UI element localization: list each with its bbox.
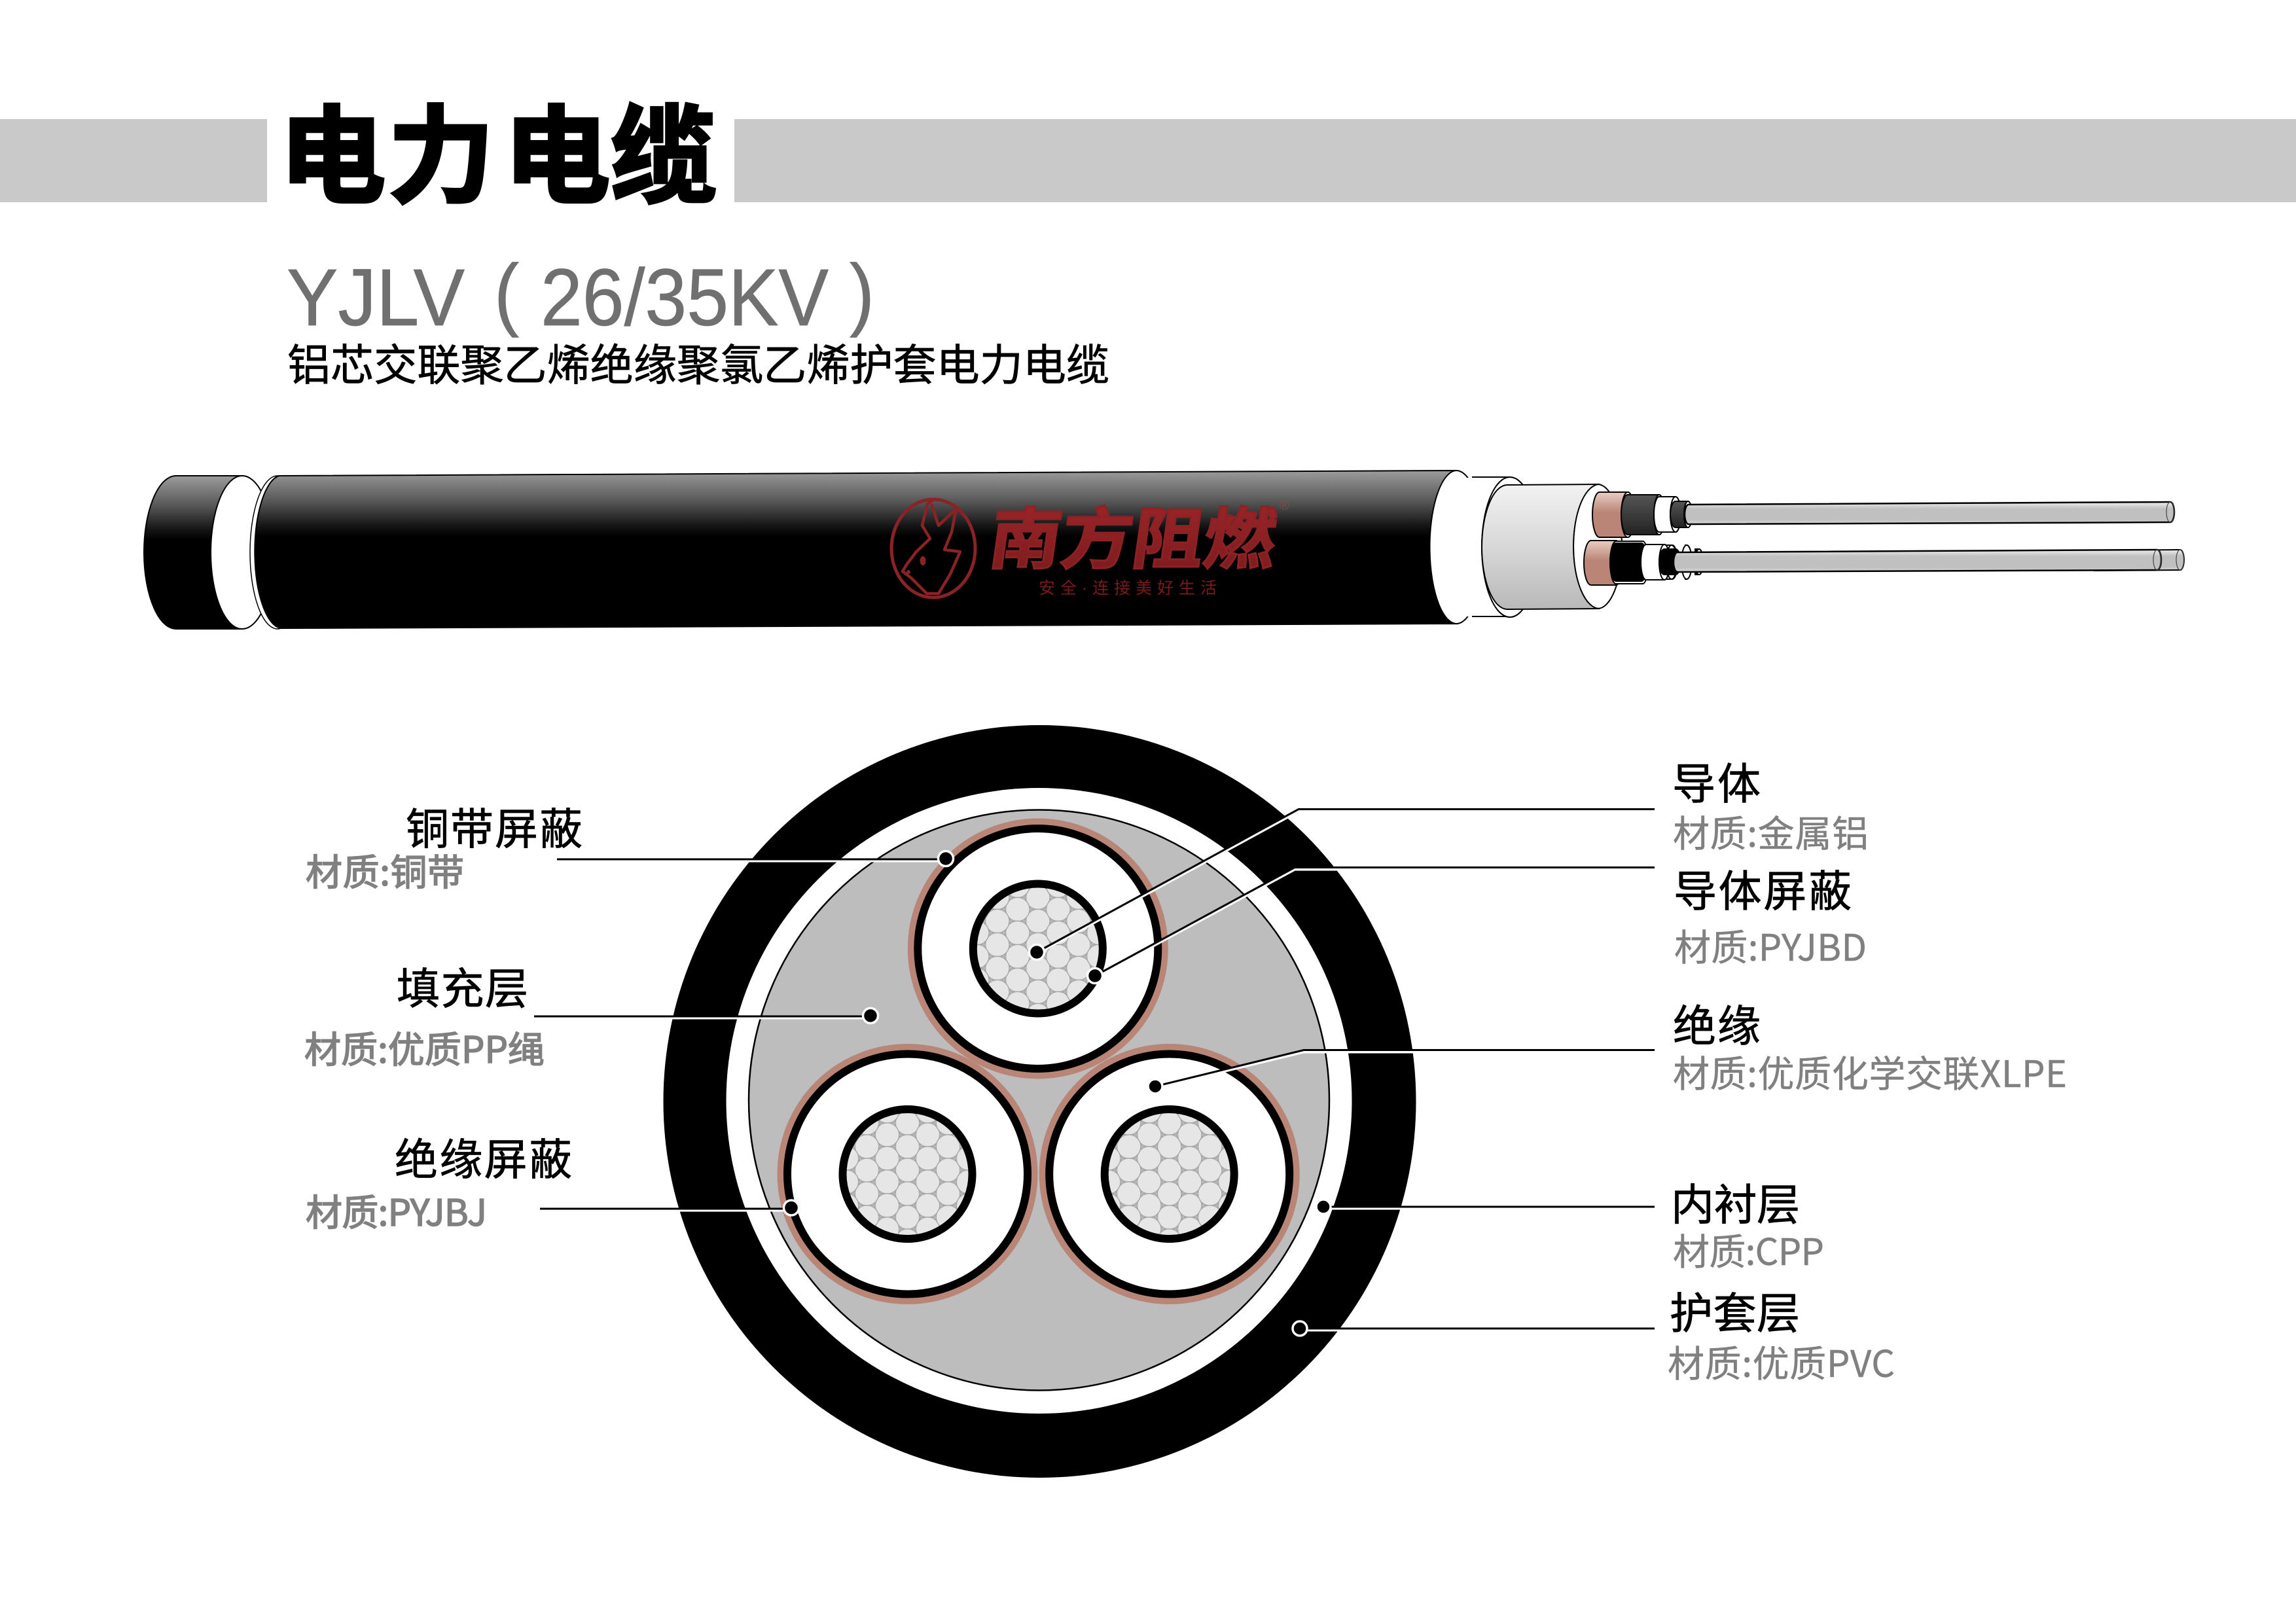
logo: slogan: 安全·连接美好生活 xyxy=(1039,579,1217,597)
upper conductor tube xyxy=(1685,502,2174,524)
cable side view xyxy=(144,471,2184,629)
logo: brand name: 南方阻燃 xyxy=(984,486,1283,582)
label: filler layer xyxy=(304,965,545,1074)
label: insulation: 绝缘 xyxy=(1673,1002,1761,1050)
label: copper tape shield xyxy=(306,805,583,897)
lower core layers xyxy=(1584,541,1703,585)
label: outer sheath: 护套层 xyxy=(1670,1289,1800,1338)
label: conductor: 导体 xyxy=(1672,760,1761,808)
core: top xyxy=(911,822,1165,1076)
model heading: 26/35KV xyxy=(541,253,829,343)
filler section xyxy=(1482,484,1622,609)
model heading: ) xyxy=(850,249,874,338)
cable cross-section xyxy=(664,725,1416,1478)
filler xyxy=(749,810,1329,1390)
model heading xyxy=(287,249,874,343)
leader: filler xyxy=(534,1008,878,1024)
leader: copper tape xyxy=(557,851,953,866)
label: insulation xyxy=(1673,1002,2067,1098)
label: insulation shield xyxy=(306,1135,572,1237)
cable cut-off end piece xyxy=(144,476,274,629)
label: inner lining xyxy=(1671,1181,1824,1276)
model heading: ( xyxy=(494,249,519,338)
label: filler layer: 填充层 xyxy=(397,965,528,1013)
label: inner lining: 材质:CPP xyxy=(1673,1223,1824,1276)
inner lining ring xyxy=(726,788,1352,1414)
label: conductor shield xyxy=(1674,867,1867,972)
outer sheath xyxy=(250,471,1483,629)
label: copper tape shield: 铜带屏蔽 xyxy=(406,805,583,853)
subtitle: 铝芯交联聚乙烯绝缘聚氯乙烯护套电力电缆 xyxy=(287,341,1109,389)
logo: registered mark: ® xyxy=(1280,499,1289,513)
label: conductor xyxy=(1672,760,1869,858)
leader: outer sheath xyxy=(1293,1321,1655,1336)
logo: rabbit xyxy=(891,499,975,597)
logo on sheath xyxy=(891,486,1289,597)
label: outer sheath: 材质:优质PVC xyxy=(1668,1335,1895,1388)
leader: conductor screen xyxy=(1088,868,1655,983)
leader: inner lining xyxy=(1316,1200,1655,1214)
title: 电力电缆 xyxy=(279,71,717,224)
inner lining section xyxy=(1466,477,1538,617)
label: insulation shield: 绝缘屏蔽 xyxy=(395,1135,572,1184)
label: copper tape shield: 材质:铜带 xyxy=(306,844,464,897)
leader: insulation xyxy=(1148,1050,1655,1094)
model heading: YJLV xyxy=(287,253,465,343)
lower conductor tubes xyxy=(1674,550,2184,572)
label: conductor shield: 导体屏蔽 xyxy=(1674,867,1852,916)
label: filler layer: 材质:优质PP绳 xyxy=(304,1021,545,1074)
core: left xyxy=(780,1047,1034,1301)
upper core layers xyxy=(1592,492,1692,537)
label: inner lining: 内衬层 xyxy=(1671,1181,1800,1229)
leader: insulation screen xyxy=(540,1200,798,1215)
grey header band xyxy=(0,119,2296,202)
label: conductor: 材质:金属铝 xyxy=(1673,805,1869,858)
label: conductor shield: 材质:PYJBD xyxy=(1674,919,1867,972)
protective sheath ring xyxy=(664,725,1416,1478)
leader: conductor xyxy=(1029,809,1655,959)
label: insulation shield: 材质:PYJBJ xyxy=(306,1184,487,1237)
label: insulation: 材质:优质化学交联XLPE xyxy=(1673,1045,2067,1098)
core: right xyxy=(1043,1047,1297,1301)
label: outer sheath xyxy=(1668,1289,1895,1388)
